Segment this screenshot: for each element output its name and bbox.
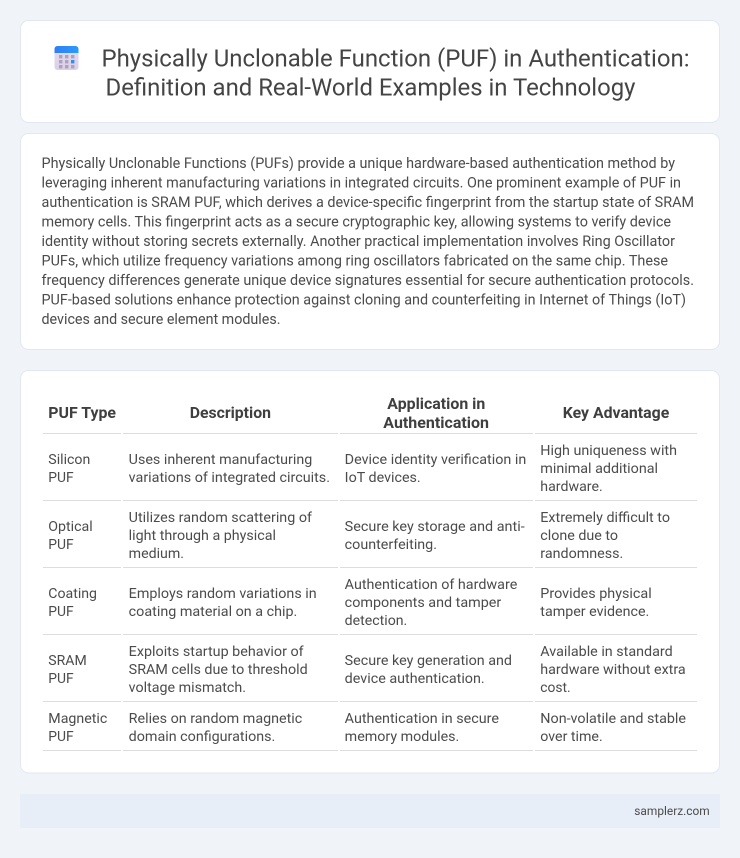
table header row: Description xyxy=(190,403,271,422)
table row: Optical PUF: clone due to xyxy=(540,528,618,544)
table row: SRAM PUF: Available in standard xyxy=(540,644,673,660)
table row: Magnetic PUF: memory modules. xyxy=(345,729,459,745)
table row: Optical PUF: light through a physical xyxy=(129,528,276,544)
table row: Silicon PUF: PUF xyxy=(48,470,74,486)
table row: Optical PUF xyxy=(48,510,670,562)
table row: SRAM PUF: device authentication. xyxy=(345,671,485,687)
table row: Coating PUF: tamper evidence. xyxy=(540,604,649,620)
table row: Optical PUF: Secure key storage and anti- xyxy=(345,519,525,535)
table row: Coating PUF: PUF xyxy=(48,604,74,620)
table row: Silicon PUF xyxy=(48,443,677,495)
footer bar: samplerz.com xyxy=(634,804,710,818)
table row: Silicon PUF: Uses inherent manufacturing xyxy=(129,452,312,468)
table row: Magnetic PUF: Authentication in secure xyxy=(345,711,499,727)
table row: Silicon PUF: Device identity verification in xyxy=(345,452,526,468)
text block: PUF overview: identity without storing secrets externally. Another practical implementation involves Ring Oscillator xyxy=(42,233,675,250)
table row: Silicon PUF: variations of integrated circuits. xyxy=(129,470,330,486)
table row: Optical PUF: Extremely difficult to xyxy=(540,510,670,526)
text block: PUF overview: frequency differences generate unique device signatures essential for secure authentication protocols. xyxy=(42,272,694,289)
table header row: Key Advantage xyxy=(563,403,670,422)
table row: Optical PUF: medium. xyxy=(129,546,184,562)
table row: Optical PUF: Optical xyxy=(48,519,93,535)
icon: calendar xyxy=(54,46,78,70)
table row: SRAM PUF: Exploits startup behavior of xyxy=(129,644,304,660)
table row: Coating PUF: Coating xyxy=(48,586,97,602)
title xyxy=(102,45,690,102)
table row: SRAM PUF xyxy=(48,644,686,696)
text block: PUF overview: PUFs, which utilize frequency variations among ring oscillators fabricated on the same chip. These xyxy=(42,252,668,270)
table row: Magnetic PUF: Non-volatile and stable xyxy=(540,711,686,727)
table row: SRAM PUF: voltage mismatch. xyxy=(129,680,246,696)
text block: PUF overview: devices and secure element modules. xyxy=(42,311,280,328)
table row: Silicon PUF: Silicon xyxy=(48,452,90,468)
text block: PUF overview: PUF-based solutions enhance protection against cloning and counterfeiting in Internet of Things (IoT) xyxy=(42,292,686,308)
text block: PUF overview: authentication is SRAM PUF, which derives a device-specific fingerprint from the startup state of SRAM xyxy=(42,194,694,211)
table header row: Application in xyxy=(387,394,485,413)
table row: Optical PUF: PUF xyxy=(48,537,74,553)
table row: Silicon PUF: minimal additional xyxy=(540,461,658,477)
title: Definition and Real-World Examples in Technology xyxy=(106,74,636,102)
table row: Coating PUF: components and tamper xyxy=(345,595,502,611)
text block: PUF overview: leveraging inherent manufacturing variations in integrated circuits. One prominent example of PUF in xyxy=(42,175,681,192)
table row: Coating PUF: coating material on a chip. xyxy=(129,604,297,620)
text block: PUF overview xyxy=(42,155,694,328)
table row: Magnetic PUF: Magnetic xyxy=(48,711,107,727)
panel: intro paragraph xyxy=(20,134,720,350)
table row: Magnetic PUF: over time. xyxy=(540,729,603,745)
table header row: Authentication xyxy=(383,413,489,432)
text block: PUF overview: Physically Unclonable Functions (PUFs) provide a unique hardware-based authentication method by xyxy=(42,155,675,172)
table row: Magnetic PUF: Relies on random magnetic xyxy=(129,711,302,727)
table row: Coating PUF: Employs random variations in xyxy=(129,586,317,602)
panel: title header xyxy=(20,20,720,122)
table row: SRAM PUF: Secure key generation and xyxy=(345,653,512,669)
table row: SRAM PUF: SRAM xyxy=(48,653,87,669)
table row: Optical PUF: Utilizes random scattering of xyxy=(129,510,312,526)
table row: Magnetic PUF: PUF xyxy=(48,729,74,745)
table row: Magnetic PUF: domain configurations. xyxy=(129,729,275,745)
table row: SRAM PUF: PUF xyxy=(48,671,74,687)
table row: Optical PUF: randomness. xyxy=(540,546,623,562)
table row: Coating PUF: detection. xyxy=(345,613,407,629)
table row: SRAM PUF: SRAM cells due to threshold xyxy=(129,662,308,678)
table row: Silicon PUF: hardware. xyxy=(540,479,603,495)
table row: Coating PUF: Authentication of hardware xyxy=(345,577,517,593)
table header row xyxy=(48,394,670,432)
table header row: PUF Type xyxy=(48,403,116,422)
table row: Coating PUF: Provides physical xyxy=(540,586,652,602)
panel: PUF comparison table xyxy=(20,370,720,773)
table row: SRAM PUF: hardware without extra xyxy=(540,662,686,678)
text block: PUF overview: memory cells. This fingerprint acts as a secure cryptographic key, allowing systems to verify device xyxy=(42,214,671,231)
table row: Magnetic PUF xyxy=(48,711,686,745)
table row: SRAM PUF: cost. xyxy=(540,680,571,696)
table row: Silicon PUF: High uniqueness with xyxy=(540,443,677,459)
title: Physically Unclonable Function (PUF) in Authentication: xyxy=(102,45,690,73)
table row: Optical PUF: counterfeiting. xyxy=(345,537,437,553)
table row: Silicon PUF: IoT devices. xyxy=(345,470,421,486)
footer bar xyxy=(20,794,720,828)
table row: Coating PUF xyxy=(48,577,652,629)
